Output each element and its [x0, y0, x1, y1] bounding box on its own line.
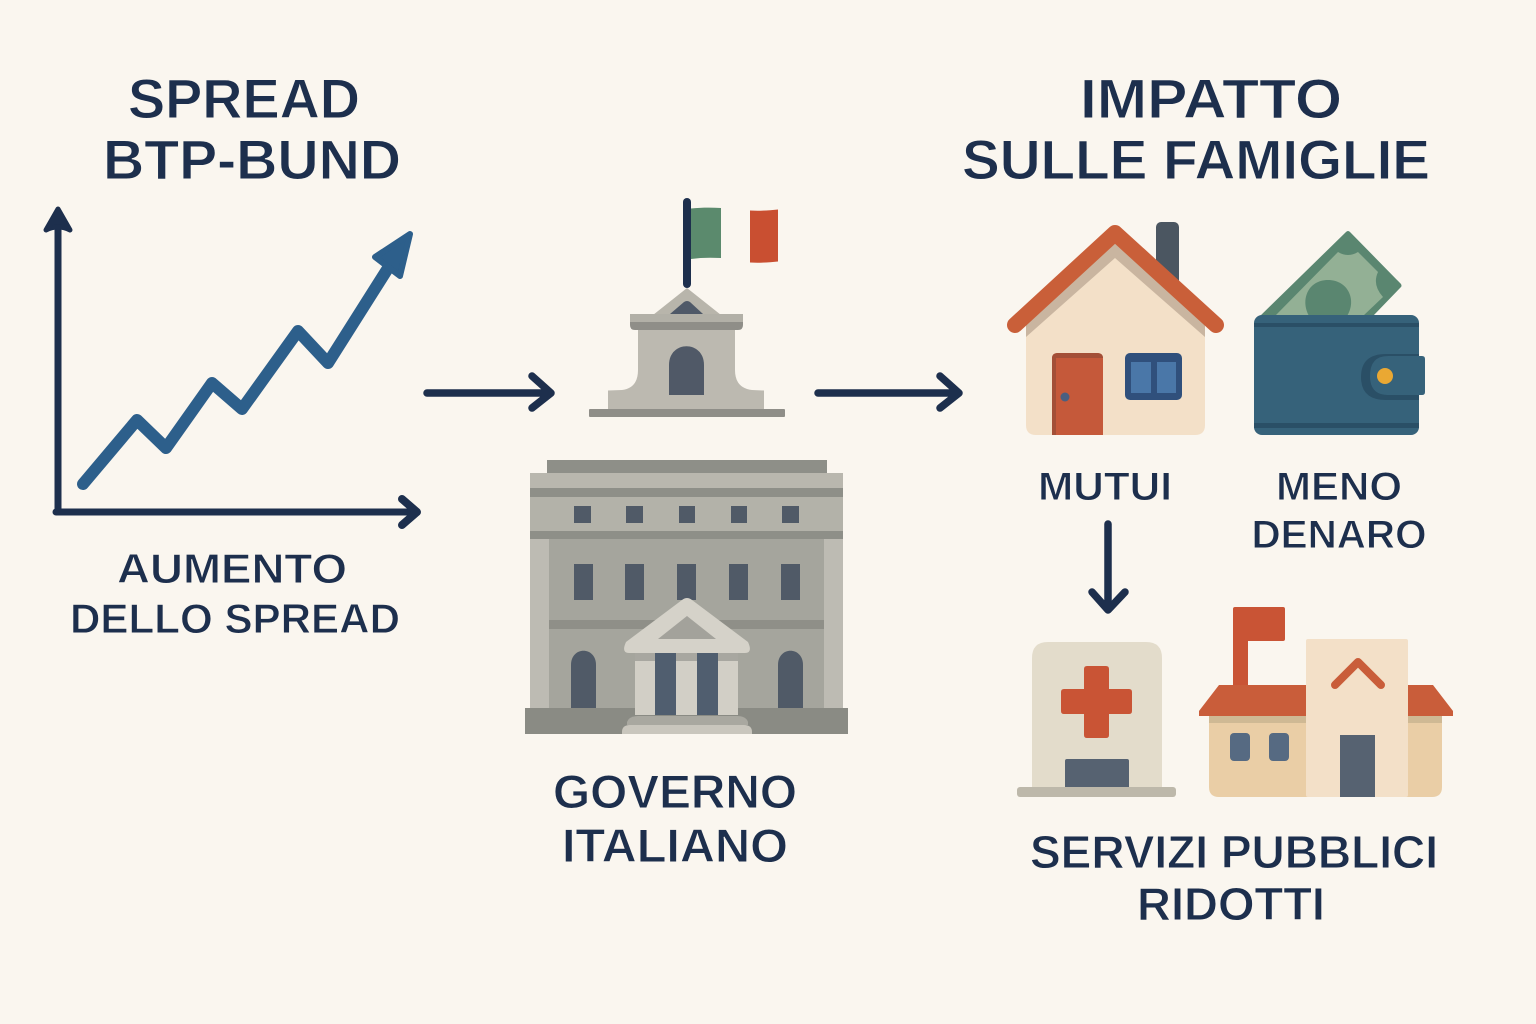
label: aumento dello spread — [70, 545, 400, 642]
label: governo italiano: GOVERNO — [553, 765, 797, 818]
title: Spread BTP-Bund: BTP-BUND — [103, 128, 401, 191]
label: servizi pubblici ridotti: SERVIZI PUBBLICI — [1030, 826, 1438, 878]
icon: small government building with Italian flag — [589, 198, 785, 417]
arrow: spread to government — [427, 376, 551, 408]
label: governo italiano: ITALIANO — [562, 819, 788, 872]
label: servizi pubblici ridotti — [1030, 826, 1438, 930]
chart axes — [46, 209, 417, 525]
label: meno denaro: DENARO — [1252, 513, 1426, 557]
title: impatto sulle famiglie: IMPATTO — [1080, 67, 1342, 130]
label: aumento dello spread: DELLO SPREAD — [70, 595, 400, 642]
icon: school — [1199, 607, 1453, 797]
label: aumento dello spread: AUMENTO — [117, 545, 347, 592]
label: meno denaro: MENO — [1276, 465, 1402, 509]
line chart: rising spread — [46, 209, 417, 525]
label: governo italiano — [553, 765, 797, 872]
title: impatto sulle famiglie — [962, 67, 1430, 191]
icon: large government palace — [525, 460, 848, 734]
icon: hospital — [1017, 642, 1176, 797]
arrow: government to families — [818, 376, 959, 408]
title: impatto sulle famiglie: SULLE FAMIGLIE — [962, 128, 1430, 191]
label: mutui: MUTUI — [1038, 465, 1172, 509]
title: Spread BTP-Bund: SPREAD — [128, 67, 360, 130]
label: meno denaro — [1252, 465, 1426, 557]
title: Spread BTP-Bund — [103, 67, 401, 191]
chart rising line with arrow — [83, 234, 410, 484]
flag — [683, 198, 778, 288]
icon: wallet with banknote — [1254, 231, 1425, 435]
arrow: mutui to services — [1092, 524, 1125, 610]
icon: house — [1015, 222, 1216, 435]
label: servizi pubblici ridotti: RIDOTTI — [1137, 878, 1325, 930]
